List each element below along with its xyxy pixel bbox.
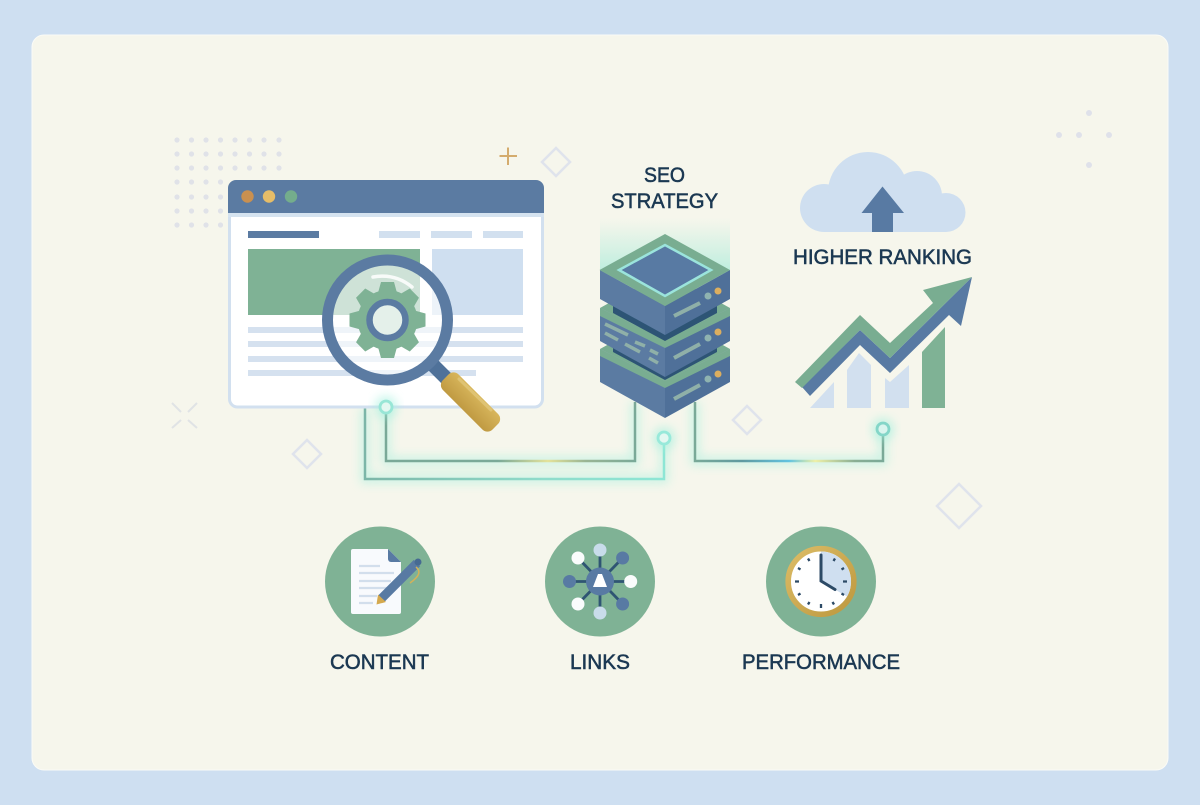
trend arrow blue xyxy=(802,277,972,396)
pale band under title bar xyxy=(228,213,544,217)
nav bar placeholders xyxy=(248,231,523,238)
server middle layer xyxy=(600,272,730,377)
label: content: CONTENT xyxy=(330,651,429,674)
connector lines xyxy=(365,402,883,479)
connector node: browser xyxy=(375,396,397,418)
handle neck xyxy=(430,362,447,379)
clock rim xyxy=(788,549,854,614)
icon: cloud with up arrow xyxy=(800,152,966,232)
chart bars xyxy=(810,327,945,408)
label: performance: PERFORMANCE xyxy=(742,651,900,674)
dark spacer upper xyxy=(613,298,717,341)
server top layer xyxy=(600,234,730,335)
label: SEO strategy: STRATEGY xyxy=(611,190,718,213)
growth chart xyxy=(795,277,972,408)
connector node: server xyxy=(653,427,675,449)
gear xyxy=(350,282,426,358)
content icon xyxy=(325,526,435,636)
diamond decorations xyxy=(293,148,981,528)
server bottom layer xyxy=(600,313,730,418)
document xyxy=(351,549,401,614)
browser title bar xyxy=(228,180,544,213)
hub xyxy=(586,568,614,596)
pencil xyxy=(381,563,417,599)
green circle xyxy=(545,526,655,636)
browser window xyxy=(228,180,544,407)
gear hub ring xyxy=(370,302,406,338)
label: SEO strategy xyxy=(611,164,718,213)
green circle xyxy=(766,526,876,636)
text lines xyxy=(248,327,523,376)
label: higher ranking: HIGHER RANKING xyxy=(793,246,972,269)
document text lines xyxy=(359,566,394,603)
dark spacer lower xyxy=(613,340,717,380)
lens xyxy=(332,265,442,375)
connector node: ranking xyxy=(872,418,894,440)
up arrow xyxy=(862,186,904,232)
clock ticks xyxy=(795,555,847,608)
side image blue block xyxy=(432,249,523,315)
clock hands xyxy=(821,555,835,590)
outer nodes xyxy=(563,544,637,620)
handle xyxy=(438,369,503,435)
label: SEO strategy: SEO xyxy=(644,164,685,187)
dot grid decoration xyxy=(174,137,282,228)
magnifying glass xyxy=(328,260,503,435)
label: links: LINKS xyxy=(570,651,630,674)
green circle xyxy=(325,526,435,636)
sparkle dots decoration xyxy=(1056,110,1112,168)
server glow halo xyxy=(600,218,730,274)
plus decoration xyxy=(500,148,517,165)
trend arrow green xyxy=(795,277,972,388)
lens rim xyxy=(328,260,448,380)
links icon xyxy=(545,526,655,636)
x decoration xyxy=(172,403,197,428)
server stack xyxy=(600,218,730,418)
window control dots xyxy=(241,190,297,203)
clock shaded wedge xyxy=(821,552,851,596)
hero image green block xyxy=(248,249,420,315)
spokes xyxy=(570,550,631,613)
performance clock icon xyxy=(766,526,876,636)
cloud xyxy=(800,152,966,232)
